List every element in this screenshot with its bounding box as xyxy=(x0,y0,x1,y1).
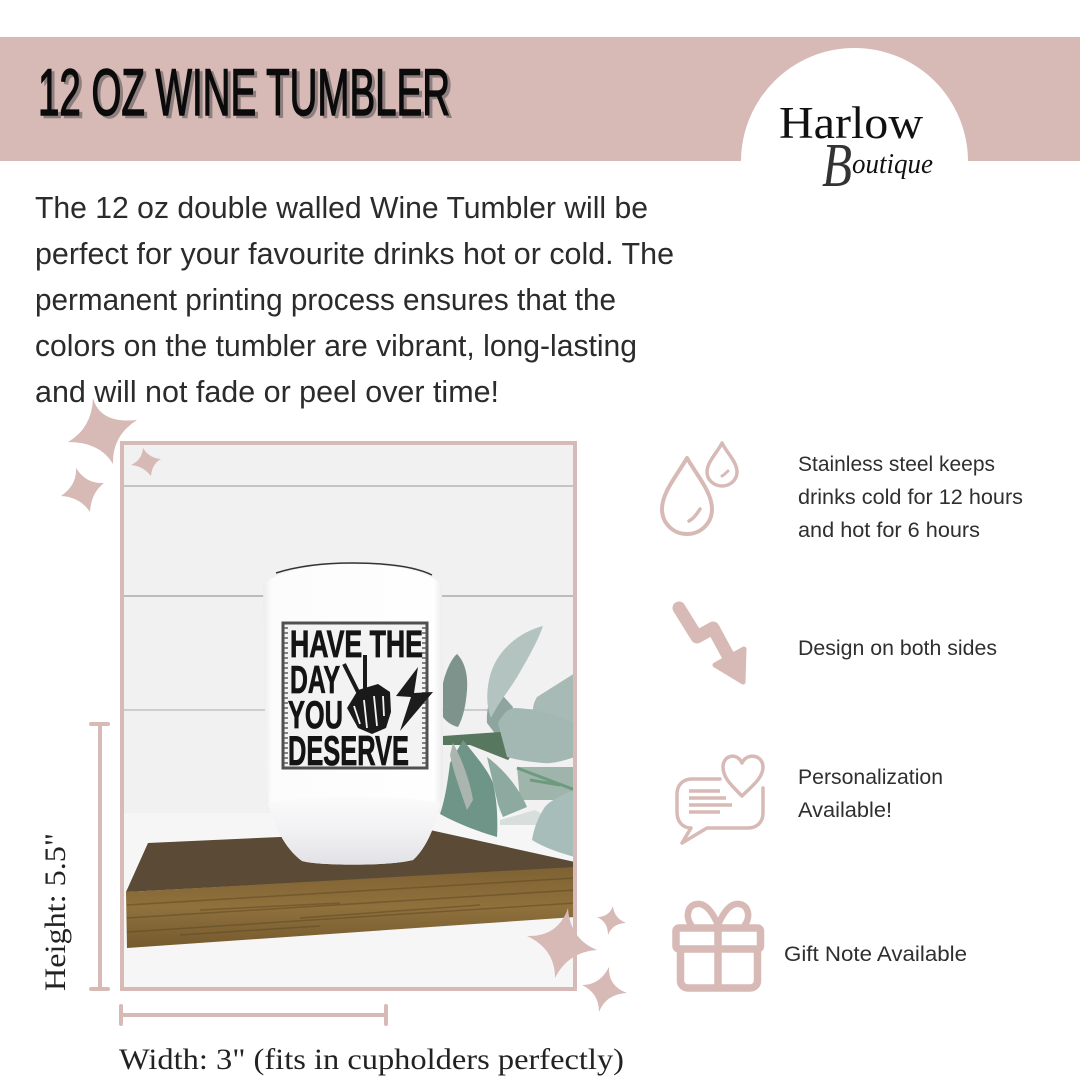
title: 12 OZ WINE TUMBLER xyxy=(41,58,453,132)
logo: Harlow Boutique: Harlow xyxy=(779,98,924,148)
photo frame xyxy=(122,443,575,989)
sparkles top left xyxy=(61,398,161,512)
feature text: stainless steel: drinks cold for 12 hours xyxy=(798,486,1023,509)
print: Have the day you deserve: HAVE THE xyxy=(290,624,423,666)
lightning bolt xyxy=(396,667,433,731)
wood block front xyxy=(126,867,575,948)
description text: colors on the tumbler are vibrant, long-lasting xyxy=(35,328,637,363)
logo: Harlow Boutique: B xyxy=(822,132,852,200)
description text xyxy=(35,190,674,409)
description text: The 12 oz double walled Wine Tumbler will be xyxy=(35,190,648,225)
feature text: stainless steel: and hot for 6 hours xyxy=(798,519,980,542)
feature text: design on both sides: Design on both sides xyxy=(798,637,997,660)
description text: perfect for your favourite drinks hot or cold. The xyxy=(35,236,674,271)
icon: gift box xyxy=(676,904,760,988)
logo: Harlow Boutique: outique xyxy=(852,149,933,180)
feature text: stainless steel xyxy=(798,453,1023,542)
dimension: height bar xyxy=(91,724,108,989)
tumbler xyxy=(263,564,443,865)
feature text: personalization: Available! xyxy=(798,799,892,822)
feature text: personalization: Personalization xyxy=(798,766,943,789)
label: height: Height: 5.5" xyxy=(39,833,72,991)
sparkles bottom right xyxy=(527,906,627,1012)
dimension: width bar xyxy=(121,1006,386,1024)
feature text: personalization xyxy=(798,766,943,822)
title: 12 OZ WINE TUMBLER xyxy=(38,55,450,129)
wall xyxy=(122,443,575,815)
logo: Harlow Boutique xyxy=(741,48,968,200)
table xyxy=(122,813,575,989)
print: Have the day you deserve: DAY xyxy=(290,659,340,702)
print: Have the day you deserve: YOU xyxy=(288,694,343,737)
description text: permanent printing process ensures that the xyxy=(35,282,616,317)
skeleton hand xyxy=(344,655,391,734)
header band xyxy=(0,37,1080,161)
icon: speech bubble with heart xyxy=(677,756,763,843)
icon: zigzag arrow xyxy=(679,608,744,682)
title xyxy=(38,55,453,132)
product photo xyxy=(122,443,575,989)
leaves xyxy=(440,626,575,857)
print: Have the day you deserve: DESERVE xyxy=(288,727,409,774)
feature text: gift note: Gift Note Available xyxy=(784,943,967,966)
label: width: Width: 3" (fits in cupholders perfectly) xyxy=(119,1043,624,1076)
feature text: stainless steel: Stainless steel keeps xyxy=(798,453,995,476)
wood block top xyxy=(126,830,575,892)
icon: water drops xyxy=(662,443,737,534)
description text: and will not fade or peel over time! xyxy=(35,374,499,409)
print: Have the day you deserve xyxy=(282,622,433,774)
